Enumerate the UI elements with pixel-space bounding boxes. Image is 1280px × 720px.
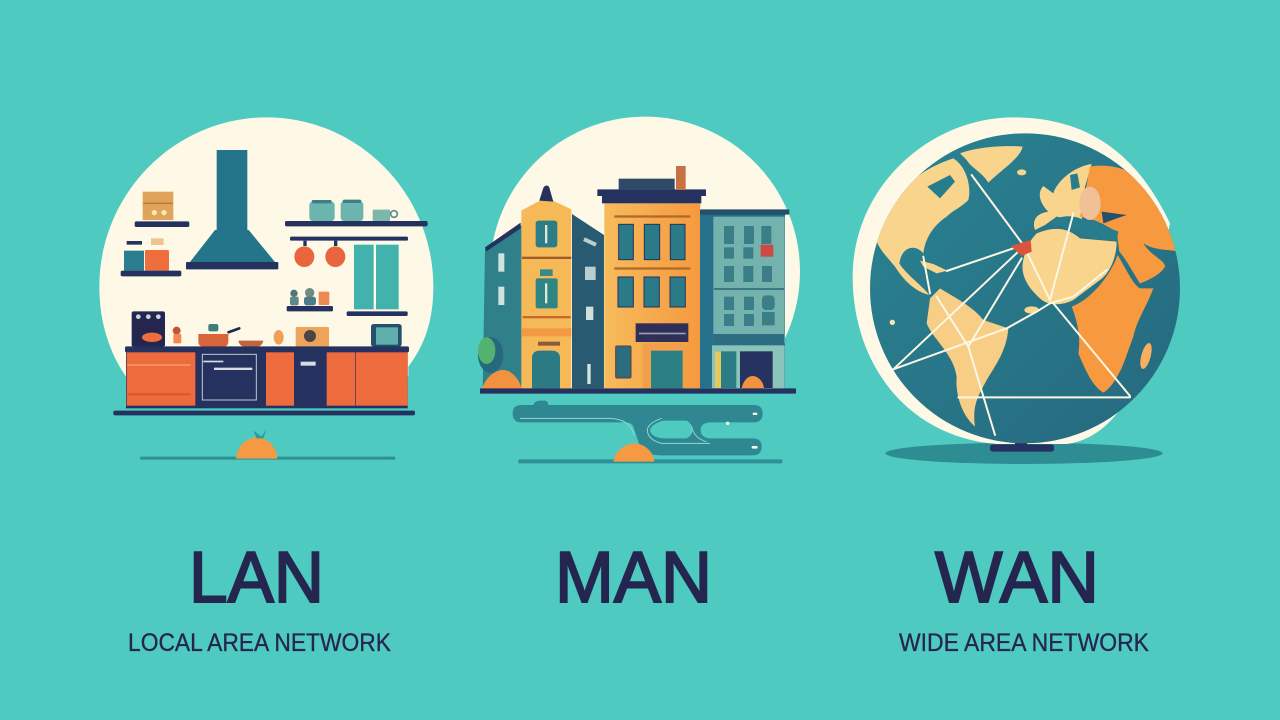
central orange building: [597, 166, 706, 388]
panel: LAN kitchen illustration: [99, 117, 433, 460]
kitchen counter and cabinets: [113, 346, 415, 415]
greenland: [960, 146, 1023, 183]
central america strip: [920, 261, 947, 273]
MAN heading: MAN: [555, 538, 712, 618]
africa body: [1072, 255, 1153, 393]
WAN heading: WAN: [935, 538, 1099, 618]
teal cover under the circle: [470, 392, 810, 458]
small shelf with ornaments: [287, 288, 333, 311]
range hood: [186, 150, 278, 269]
hudson bay: [927, 175, 955, 198]
mediterranean: [1060, 216, 1118, 240]
underground network pipes: [513, 401, 763, 455]
north sea gap: [1070, 173, 1080, 190]
north africa: [1022, 229, 1117, 304]
cream circle backdrop: [99, 117, 433, 377]
right teal building: [700, 209, 789, 389]
tree and shrub: [478, 337, 522, 389]
globe stand: [990, 435, 1054, 452]
cream backing disc: [853, 117, 1170, 444]
counter-top appliances: [132, 311, 402, 347]
south america: [927, 288, 1008, 427]
north america: [877, 158, 969, 295]
panel: WAN globe illustration: [853, 117, 1187, 464]
orange dome: [236, 428, 277, 459]
pale patch: [1079, 187, 1101, 220]
LAN subtitle: LOCAL AREA NETWORK: [128, 629, 391, 657]
hanging rail with pans: [290, 237, 408, 267]
panel: MAN buildings illustration: [470, 117, 810, 463]
cream circle backdrop: [490, 117, 800, 427]
islands: [1024, 306, 1039, 314]
network lines: [893, 175, 1130, 435]
LAN heading: LAN: [189, 538, 324, 618]
asia and arabia: [1080, 166, 1176, 284]
black sea: [1102, 212, 1127, 223]
globe ocean: [870, 133, 1180, 443]
street line: [480, 388, 796, 394]
tall yellow building: [521, 185, 571, 388]
madagascar: [1140, 343, 1152, 369]
iceland: [1017, 169, 1026, 175]
WAN subtitle: WIDE AREA NETWORK: [899, 629, 1149, 657]
right top shelf with pots: [285, 200, 428, 226]
baseline shadow: [140, 457, 395, 460]
left teal building: [483, 223, 522, 389]
continents: [877, 146, 1187, 427]
hub marker: [1011, 240, 1032, 256]
orange dome: [613, 443, 654, 462]
baseline shadow: [518, 459, 782, 463]
dark side of yellow building: [572, 214, 604, 388]
window: [347, 245, 408, 316]
left shelves: [121, 192, 189, 276]
europe: [1034, 164, 1092, 230]
ground shadow: [885, 443, 1163, 464]
